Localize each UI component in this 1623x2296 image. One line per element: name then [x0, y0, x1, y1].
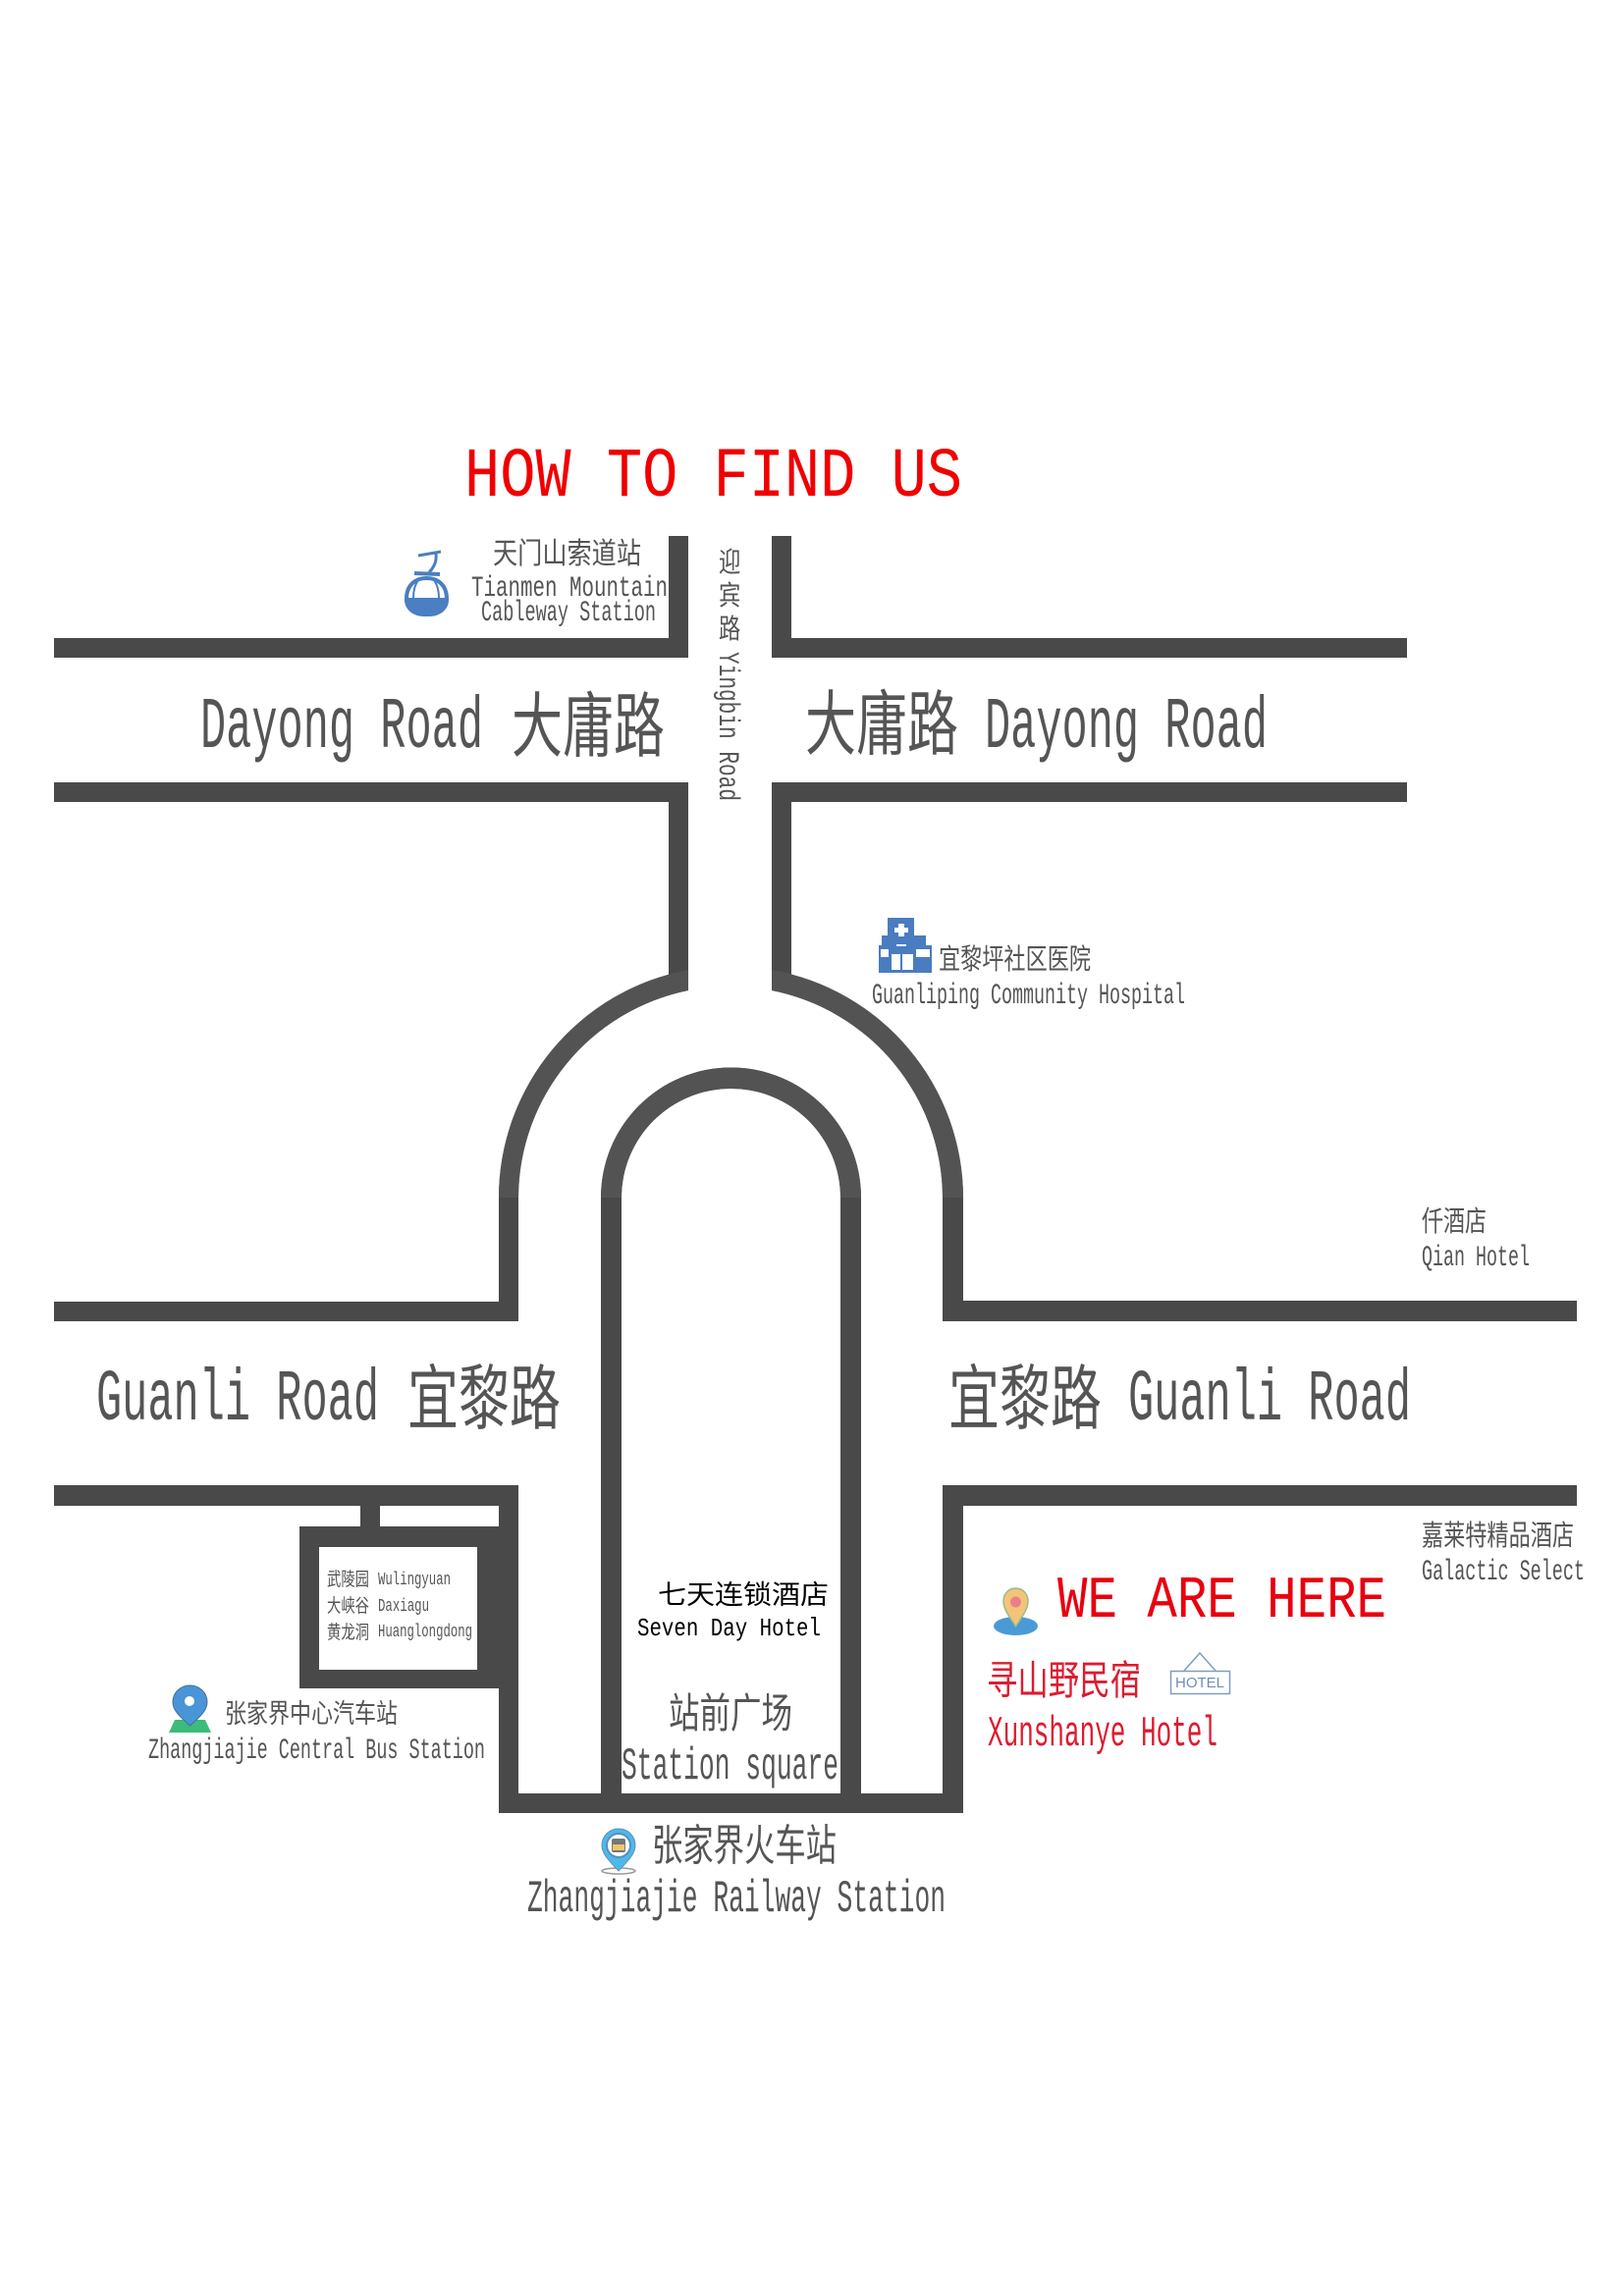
destination: Daxiagu: Daxiagu [378, 1597, 429, 1617]
landmark: Guanliping Community Hospital [872, 918, 1185, 1013]
icon: location pin [994, 1588, 1038, 1635]
destination: Huanglongdong [327, 1622, 472, 1643]
landmark: Zhangjiajie Central Bus Station: Zhangjiajie Central Bus Station [148, 1735, 485, 1768]
landmark: Qian Hotel [1422, 1205, 1530, 1275]
landmark: Qian Hotel: 仟酒店 [1422, 1205, 1487, 1238]
road: Guanli Road south-west kerb [54, 1485, 1577, 1813]
road label: Dayong Road west: Dayong Road [200, 687, 483, 770]
icon: bus station pin [169, 1685, 211, 1733]
destination: Daxiagu [327, 1595, 429, 1617]
road label: Dayong Road east [805, 686, 1268, 770]
callout: we are here: Xunshanye Hotel [988, 1710, 1217, 1759]
sign board frame [299, 1506, 499, 1688]
destination: Daxiagu: 大峡谷 [327, 1595, 369, 1617]
landmark: Station square [622, 1690, 839, 1792]
road label: Dayong Road east: Dayong Road [985, 687, 1268, 770]
landmark: Qian Hotel: Qian Hotel [1422, 1242, 1530, 1275]
landmark: Station square: Station square [622, 1741, 839, 1792]
landmark: Guanliping Community Hospital: 宜黎坪社区医院 [939, 943, 1091, 976]
landmark: Guanliping Community Hospital: Guanliping Community Hospital [872, 980, 1185, 1013]
landmark: Galactic Select: 嘉莱特精品酒店 [1422, 1520, 1574, 1552]
landmark: Zhangjiajie Central Bus Station: 张家界中心汽车站 [225, 1699, 398, 1729]
landmark: Seven Day Hotel: Seven Day Hotel [637, 1614, 821, 1643]
landmark: Seven Day Hotel: 七天连锁酒店 [658, 1580, 829, 1610]
road label: Dayong Road west: 大庸路 [512, 688, 665, 767]
landmark: Tianmen Mountain Cableway Station: 天门山索道站 [493, 538, 641, 570]
icon: railway pin [602, 1829, 635, 1874]
road: Dayong Road north-east kerb [772, 536, 1407, 658]
road label: Yingbin Road: Yingbin Road [710, 652, 743, 801]
landmark: Tianmen Mountain Cableway Station [405, 538, 668, 630]
icon: hospital [879, 918, 932, 973]
landmark: Station square: 站前广场 [669, 1690, 792, 1736]
landmark: Zhangjiajie Central Bus Station [148, 1685, 485, 1768]
road: Dayong Road south-west kerb and outer arch [54, 782, 688, 1321]
destination: Huanglongdong: Huanglongdong [378, 1623, 472, 1642]
landmark: Tianmen Mountain Cableway Station: Tianmen Mountain [471, 572, 668, 606]
destination: Wulingyuan [327, 1569, 451, 1590]
landmark: Zhangjiajie Railway Station: Zhangjiajie Railway Station [527, 1874, 946, 1925]
road label: Guanli Road west: 宜黎路 [407, 1361, 561, 1439]
road label: Guanli Road east: 宜黎路 [948, 1361, 1102, 1439]
road network [54, 536, 1577, 1813]
road label: Dayong Road east: 大庸路 [805, 686, 958, 765]
road arches shading [499, 970, 963, 1198]
road label: Yingbin Road: 迎宾路 [719, 548, 740, 645]
destination: Wulingyuan: 武陵园 [327, 1569, 369, 1590]
icon: hotel sign: HOTEL [1175, 1675, 1224, 1691]
title: HOW TO FIND US [464, 439, 962, 517]
destination: Wulingyuan: Wulingyuan [378, 1571, 451, 1590]
landmark: Galactic Select [1422, 1520, 1585, 1589]
road: inner station arch [601, 1068, 861, 1793]
callout: we are here: 寻山野民宿 [987, 1658, 1141, 1703]
destination: Huanglongdong: 黄龙洞 [327, 1622, 369, 1643]
sign board: scenic destinations [327, 1569, 472, 1643]
callout: we are here [987, 1569, 1386, 1759]
callout: we are here: WE ARE HERE [1057, 1569, 1386, 1635]
icon: hotel sign [1170, 1653, 1229, 1694]
road label: Guanli Road east [948, 1360, 1411, 1442]
road: Dayong Road south-east kerb and outer arch [772, 782, 1577, 1321]
road label: Guanli Road west: Guanli Road [96, 1360, 379, 1442]
road label: Guanli Road east: Guanli Road [1128, 1360, 1411, 1442]
road label: Yingbin Road [710, 548, 743, 801]
landmark: Seven Day Hotel [637, 1580, 829, 1643]
landmark: Tianmen Mountain Cableway Station: Cableway Station [481, 597, 656, 630]
icon: cable car [405, 552, 449, 616]
road: Dayong Road north-west kerb [54, 536, 688, 658]
landmark: Zhangjiajie Railway Station: 张家界火车站 [652, 1822, 837, 1870]
landmark: Zhangjiajie Railway Station [527, 1822, 946, 1925]
